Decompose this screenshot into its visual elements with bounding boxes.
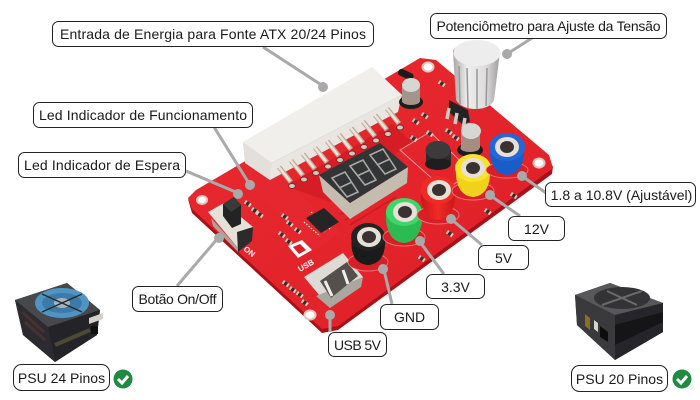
icon: USB port bbox=[296, 253, 363, 308]
label: USB 5V bbox=[328, 332, 386, 356]
label: ATX input bbox=[52, 22, 374, 46]
arrow: 5V leader bbox=[446, 214, 482, 245]
arrow: potentiometer leader bbox=[502, 38, 532, 59]
icon: mounting holes bbox=[197, 62, 544, 320]
icon: green check 20 bbox=[672, 370, 692, 388]
label: GND bbox=[380, 304, 438, 330]
label: adjustable output bbox=[546, 182, 696, 206]
icon: red banana jack 5V bbox=[417, 176, 459, 224]
label: PSU 24 pins bbox=[14, 364, 110, 390]
icon: black banana jack GND bbox=[348, 223, 388, 271]
arrow: standby LED leader bbox=[186, 171, 243, 199]
icon: surface-mount parts bbox=[244, 80, 518, 306]
icon: on/off slide switch: ON bbox=[242, 244, 257, 259]
icon: green check 24 bbox=[114, 370, 132, 388]
label: potentiometer bbox=[430, 14, 666, 38]
arrow: ATX connector leader bbox=[263, 47, 328, 92]
label: GND: GND bbox=[394, 309, 425, 325]
label: PSU 20 pins: PSU 20 Pinos bbox=[576, 371, 663, 387]
label: running LED bbox=[34, 102, 252, 128]
label: 12V: 12V bbox=[524, 221, 550, 237]
arrow: adjustable output leader bbox=[517, 171, 546, 193]
label: 12V bbox=[508, 216, 564, 240]
label: PSU 24 pins: PSU 24 Pinos bbox=[18, 370, 105, 386]
arrow: switch leader bbox=[177, 233, 224, 286]
label: on/off button: Botão On/Off bbox=[138, 291, 217, 307]
icon: blue banana jack adjustable bbox=[486, 133, 528, 178]
icon: 24-pin power supply bbox=[15, 283, 103, 362]
arrow: running LED leader bbox=[214, 127, 255, 190]
icon: ATX power connector bbox=[243, 67, 404, 188]
label: USB 5V: USB 5V bbox=[334, 337, 382, 353]
label: potentiometer: Potenciômetro para Ajuste da Tensão bbox=[436, 18, 661, 34]
label: standby LED bbox=[18, 152, 186, 178]
icon: capacitors and inductor bbox=[397, 68, 483, 170]
icon: SMD chip bbox=[304, 208, 339, 236]
arrow: USB leader bbox=[325, 310, 335, 332]
label: PSU 20 pins bbox=[572, 366, 668, 392]
label: ATX input: Entrada de Energia para Fonte ATX 20/24 Pinos bbox=[60, 26, 366, 42]
arrow: GND leader bbox=[378, 264, 392, 304]
label: standby LED: Led Indicador de Espera bbox=[24, 157, 180, 173]
label: 3.3V: 3.3V bbox=[441, 279, 471, 295]
icon: 3-digit LED display bbox=[319, 143, 408, 219]
label: 3.3V bbox=[426, 274, 484, 298]
icon: potentiometer with aluminium knob bbox=[447, 40, 500, 129]
icon: USB port: USB bbox=[296, 257, 316, 274]
label: 5V bbox=[478, 246, 528, 270]
label: on/off button bbox=[132, 286, 222, 312]
icon: yellow banana jack 12V bbox=[452, 154, 494, 200]
icon: green banana jack 3.3V bbox=[383, 198, 425, 246]
arrow: 3.3V leader bbox=[415, 236, 444, 274]
icon: 20-pin power supply bbox=[575, 283, 663, 360]
icon: on/off slide switch bbox=[208, 197, 257, 259]
label: adjustable output: 1.8 a 10.8V (Ajustável) bbox=[551, 187, 692, 203]
label: running LED: Led Indicador de Funcionamento bbox=[39, 107, 247, 123]
panel: red PCB board bbox=[188, 58, 553, 333]
arrow: 12V leader bbox=[485, 190, 520, 216]
label: 5V: 5V bbox=[495, 250, 513, 266]
